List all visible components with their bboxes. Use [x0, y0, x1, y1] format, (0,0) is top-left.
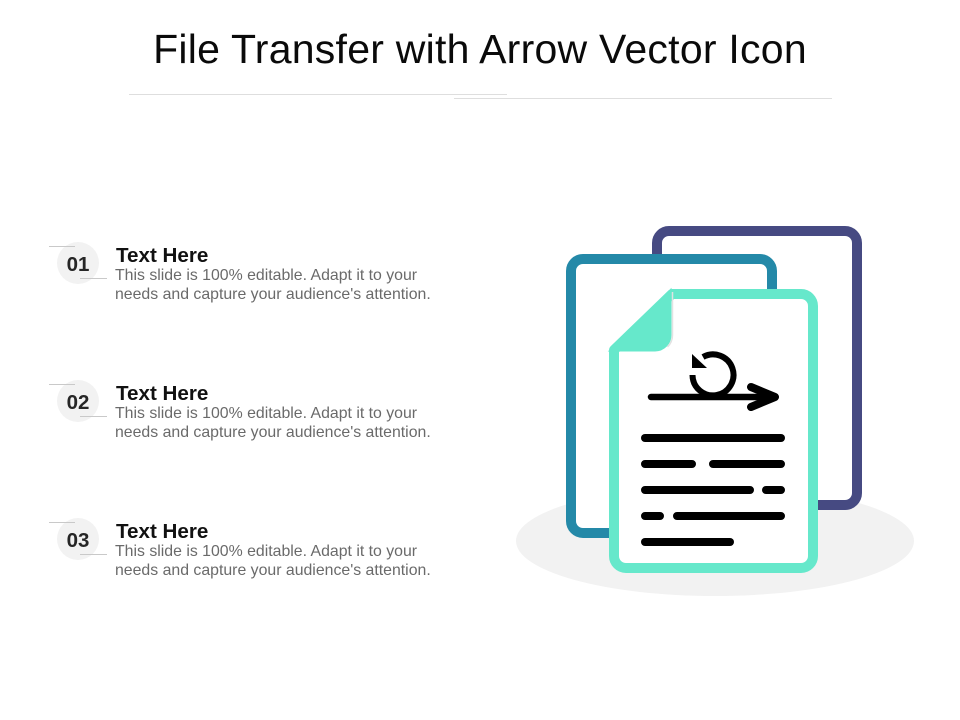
body text 02: needs and capture your audience's attention. [115, 424, 431, 441]
body text 03: needs and capture your audience's attention. [115, 562, 431, 579]
front document mint [614, 294, 813, 568]
number badge 01: 01 [67, 253, 89, 276]
list item 01 [49, 242, 431, 303]
text lines on document [645, 438, 781, 542]
body text 01: needs and capture your audience's attention. [115, 286, 431, 303]
list item 02 [49, 380, 431, 441]
body text 01: This slide is 100% editable. Adapt it to your [115, 267, 417, 284]
list item 03 [49, 518, 431, 579]
body text 01 [115, 267, 431, 303]
title: File Transfer with Arrow Vector Icon [153, 26, 807, 72]
folded corner [609, 289, 671, 351]
heading 01: Text Here [116, 244, 208, 267]
body text 02: This slide is 100% editable. Adapt it to your [115, 405, 417, 422]
middle document teal [571, 259, 772, 533]
body text 03: This slide is 100% editable. Adapt it to your [115, 543, 417, 560]
body text 02 [115, 405, 431, 441]
body text 03 [115, 543, 431, 579]
heading 03: Text Here [116, 520, 208, 543]
ground shadow ellipse [516, 486, 914, 596]
heading 02: Text Here [116, 382, 208, 405]
number badge 02: 02 [67, 391, 89, 414]
number badge 02 [57, 380, 99, 422]
number badge 01 [57, 242, 99, 284]
number badge 03: 03 [67, 529, 89, 552]
back document navy [657, 231, 857, 505]
number badge 03 [57, 518, 99, 560]
rotate and arrow icon [651, 354, 775, 407]
